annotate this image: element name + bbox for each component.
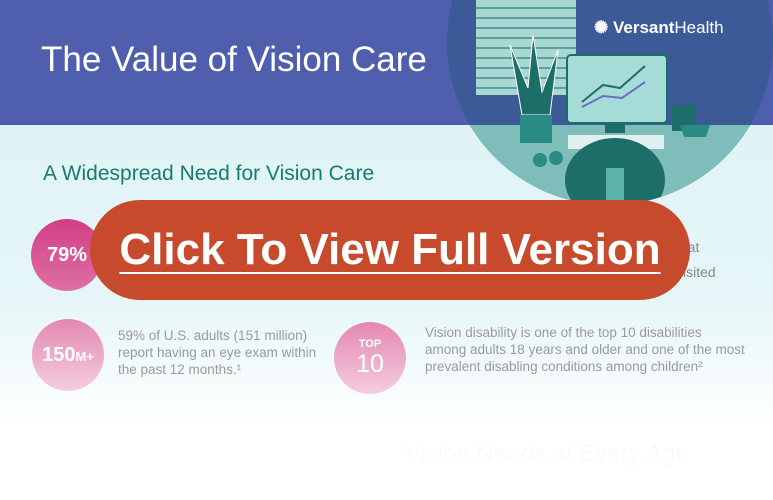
- text top 10: Vision disability is one of the top 10 disabilities: [425, 325, 702, 340]
- monitor: [567, 55, 667, 133]
- partial text right: [676, 239, 716, 280]
- text 150M: the past 12 months.¹: [118, 362, 241, 377]
- glasses: [533, 151, 563, 167]
- stat 150M+: [32, 319, 104, 391]
- button: Click To View Full Version: [119, 225, 661, 274]
- illustration circle: [447, 0, 773, 201]
- title: The Value of Vision Care: [41, 40, 427, 79]
- text 150M: [118, 328, 316, 377]
- text top 10: prevalent disabling conditions among children²: [425, 359, 703, 374]
- logo: ✺ VersantHealth: [594, 18, 724, 37]
- faded heading: Vision Needs at Every Age: [405, 440, 689, 467]
- text top 10: among adults 18 years and older and one of the most: [425, 342, 745, 357]
- partial text right: e at: [676, 239, 699, 255]
- chair: [565, 138, 665, 201]
- stat top 10: 10: [356, 350, 384, 378]
- stat top 10: TOP: [359, 338, 381, 350]
- text 150M: report having an eye exam within: [118, 345, 316, 360]
- stat 79%: [31, 219, 103, 291]
- subheading: A Widespread Need for Vision Care: [43, 162, 374, 185]
- keyboard: [568, 135, 664, 149]
- partial text right: visited: [676, 264, 716, 280]
- stat 150M+: 150M+: [42, 344, 94, 366]
- text 150M: 59% of U.S. adults (151 million): [118, 328, 307, 343]
- header band: [0, 0, 773, 125]
- button: [90, 200, 690, 300]
- pencil cup: [672, 105, 696, 131]
- text top 10: [425, 325, 745, 374]
- plant: [510, 35, 558, 143]
- stat 79%: 79%: [47, 244, 87, 266]
- window blinds: [476, 0, 576, 95]
- stat top 10: [334, 322, 406, 394]
